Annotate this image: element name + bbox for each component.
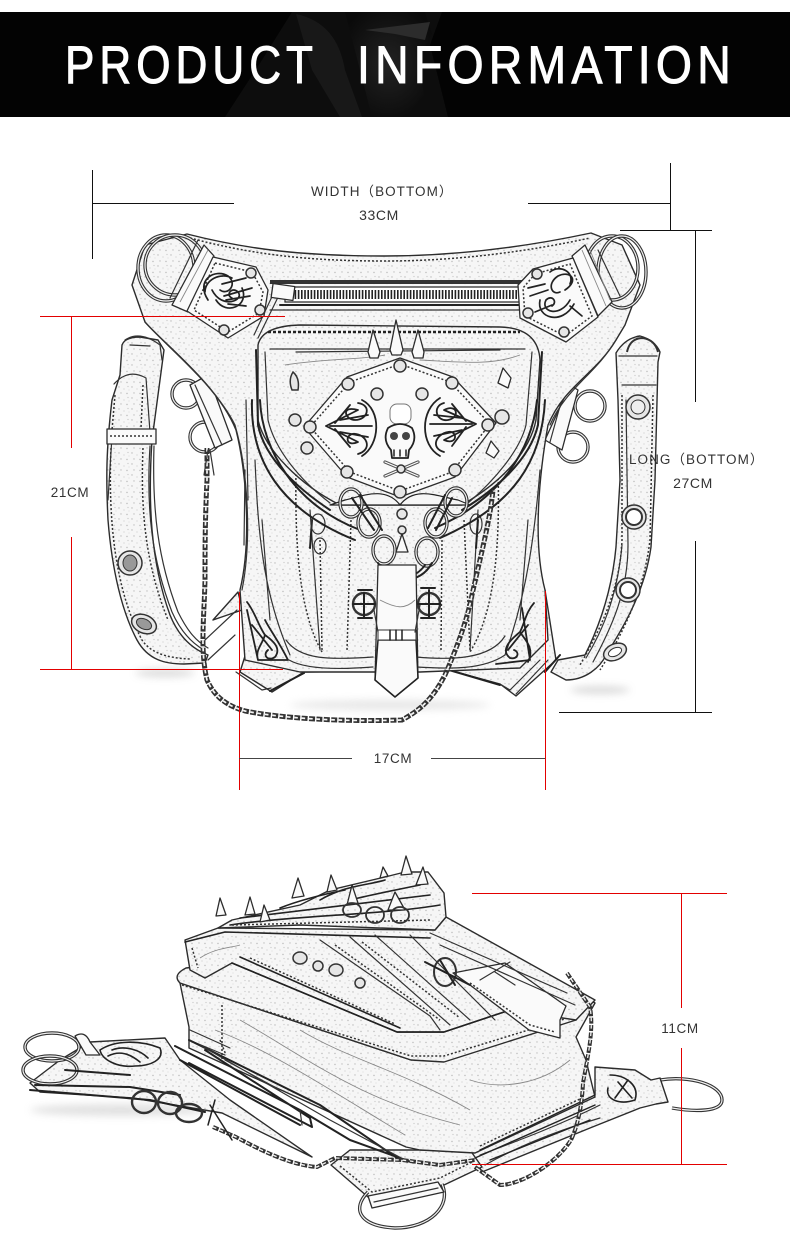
dimension: 21cm [40, 316, 285, 670]
banner background figure [225, 12, 448, 117]
dimension: long 27cm: LONG（BOTTOM） [629, 452, 764, 467]
strap tab [425, 933, 575, 1038]
plate rivets [289, 360, 509, 498]
side rings and tabs [172, 375, 605, 462]
dimension: 17cm: 17CM [374, 751, 412, 766]
hanging chain [203, 448, 493, 721]
dimension: 11cm: 11CM [661, 1021, 699, 1036]
spiked plate on top [216, 856, 446, 930]
zipper [254, 280, 522, 338]
banner title [65, 36, 736, 95]
header banner [0, 12, 790, 117]
grommets [118, 551, 160, 638]
left filigree [326, 400, 376, 456]
dimension: long 27cm: 27CM [673, 475, 713, 491]
upper flap with straps [185, 917, 595, 1038]
strap pipes across flap [244, 400, 545, 545]
dimension: width 33cm: 33CM [359, 207, 399, 223]
side view of bag [23, 856, 722, 1228]
ground shadows [30, 669, 630, 1116]
left ornament plate [187, 257, 268, 338]
right shoulder strap [551, 336, 660, 680]
skull plate [289, 358, 509, 498]
front flap pocket [244, 320, 545, 545]
buckle studs [353, 588, 440, 618]
flap studs [293, 952, 365, 988]
front buckle tab [353, 565, 440, 697]
main body silhouette [132, 233, 640, 672]
dimension: width 33cm: WIDTH（BOTTOM） [311, 184, 453, 199]
main body [180, 983, 595, 1153]
left wing and rings [23, 1033, 312, 1157]
right wing and d-ring [470, 1067, 722, 1172]
corner filigrees [247, 602, 534, 664]
front view of bag [107, 233, 660, 721]
grommets [601, 395, 650, 664]
dimension: long 27cm [559, 230, 764, 712]
dimension: 11cm [472, 893, 727, 1164]
body straps along lower edge [175, 1040, 595, 1162]
side chains [208, 973, 591, 1185]
top fold of main body [177, 963, 580, 1062]
dimension: width 33cm [92, 163, 670, 259]
banner title: PRODUCT [65, 36, 318, 95]
dimension: 21cm: 21CM [51, 485, 89, 500]
banner title: INFORMATION [357, 36, 736, 95]
top spikes [290, 320, 511, 458]
lower flange behind body [205, 590, 560, 696]
vertical body seams [255, 460, 540, 668]
spikes [216, 856, 428, 922]
right ornament plate [518, 258, 598, 342]
left shoulder strap [107, 336, 208, 664]
top ring loops [138, 235, 646, 316]
dimension: 17cm [239, 591, 546, 790]
right filigree [425, 398, 476, 456]
skull [385, 404, 418, 476]
hanging rings below flap [340, 488, 467, 580]
lower flange and d-ring [331, 1150, 482, 1228]
